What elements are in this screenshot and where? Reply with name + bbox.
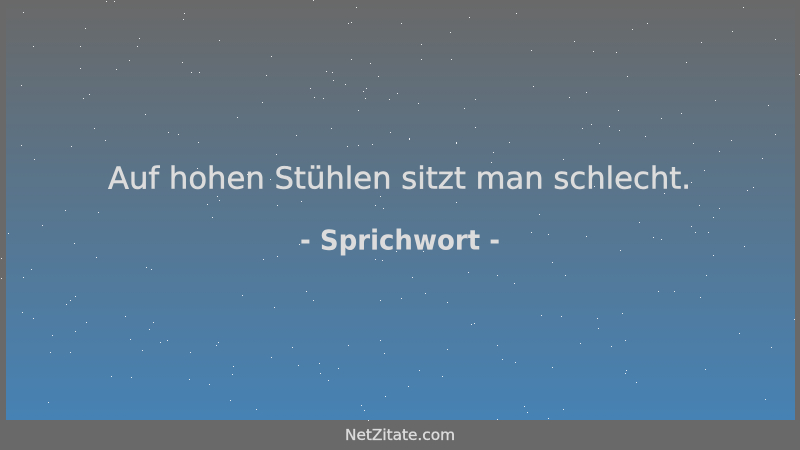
attribution: - Sprichwort - xyxy=(300,224,500,256)
quote text: Auf hohen Stühlen sitzt man schlecht. xyxy=(108,162,691,196)
footer site name: NetZitate.com xyxy=(345,426,455,444)
